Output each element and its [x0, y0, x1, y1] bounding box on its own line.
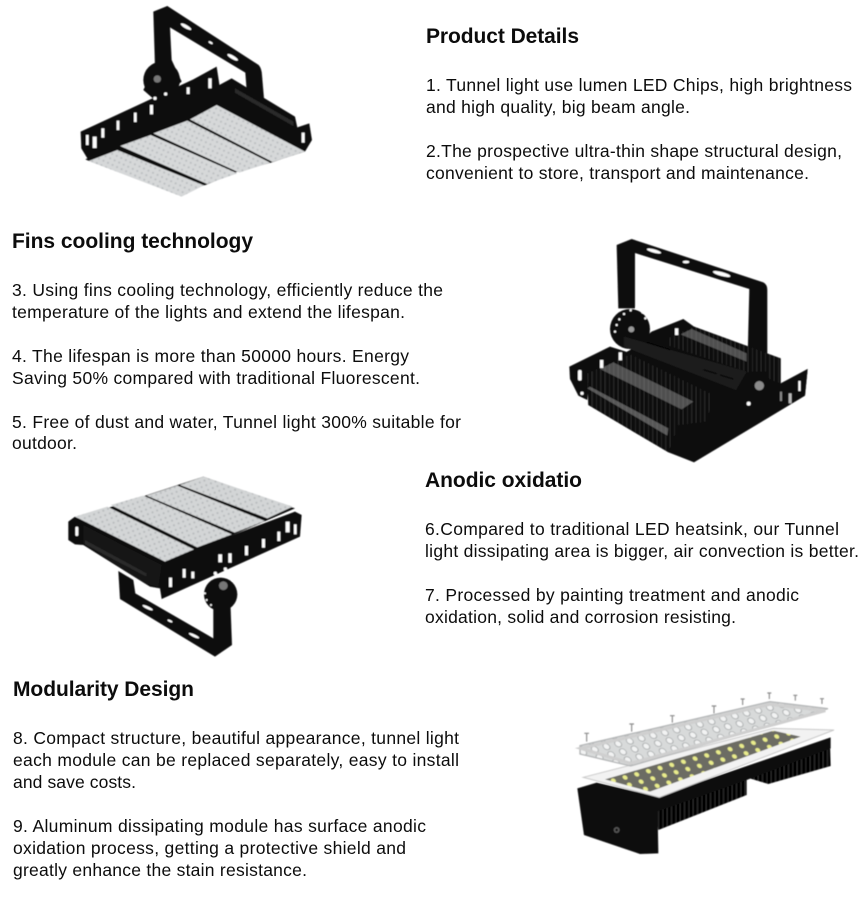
heading: Product Details: Product Details: [426, 25, 579, 48]
text block: points 3 to 5: 5. Free of dust and water, Tunnel light 300% suitable for: [12, 412, 461, 432]
text block: points 8 and 9: 8. Compact structure, beautiful appearance, tunnel light: [13, 728, 459, 748]
text block: points 8 and 9: and save costs.: [13, 772, 136, 792]
text block: points 3 to 5: [12, 280, 461, 453]
heading: Modularity Design: Modularity Design: [13, 678, 194, 701]
product photo: exploded LED module: [577, 693, 834, 854]
text block: points 8 and 9: oxidation process, getting a protective shield and: [13, 838, 406, 858]
text block: points 3 to 5: Saving 50% compared with traditional Fluorescent.: [12, 368, 420, 388]
text block: points 8 and 9: [13, 728, 459, 880]
text block: points 6 and 7: light dissipating area is bigger, air convection is better.: [425, 541, 859, 561]
text block: points 1 and 2: convenient to store, transport and maintenance.: [426, 163, 809, 183]
text block: points 3 to 5: 4. The lifespan is more than 50000 hours. Energy: [12, 346, 409, 366]
text block: points 1 and 2: 1. Tunnel light use lumen LED Chips, high brightness: [426, 75, 852, 95]
text block: points 3 to 5: temperature of the lights and extend the lifespan.: [12, 302, 405, 322]
product photo: tunnel light from below: [81, 6, 312, 197]
text block: points 8 and 9: greatly enhance the stain resistance.: [13, 860, 307, 880]
product photo: tunnel light front panels: [68, 477, 302, 657]
text block: points 6 and 7: oxidation, solid and corrosion resisting.: [425, 607, 736, 627]
text block: points 1 and 2: 2.The prospective ultra-thin shape structural design,: [426, 141, 842, 161]
text block: points 6 and 7: 6.Compared to traditional LED heatsink, our Tunnel: [425, 519, 839, 539]
product photo: tunnel light heatsink fins: [569, 239, 808, 462]
heading: Fins cooling technology: Fins cooling technology: [12, 230, 253, 253]
text block: points 3 to 5: outdoor.: [12, 433, 77, 453]
text block: points 3 to 5: 3. Using fins cooling technology, efficiently reduce the: [12, 280, 443, 300]
text block: points 6 and 7: 7. Processed by painting treatment and anodic: [425, 585, 799, 605]
text block: points 6 and 7: [425, 519, 859, 627]
heading: Anodic oxidatio: Anodic oxidatio: [425, 469, 582, 492]
text block: points 8 and 9: each module can be replaced separately, easy to install: [13, 750, 459, 770]
text block: points 8 and 9: 9. Aluminum dissipating module has surface anodic: [13, 816, 426, 836]
text block: points 1 and 2: [426, 75, 852, 183]
text block: points 1 and 2: and high quality, big beam angle.: [426, 97, 690, 117]
